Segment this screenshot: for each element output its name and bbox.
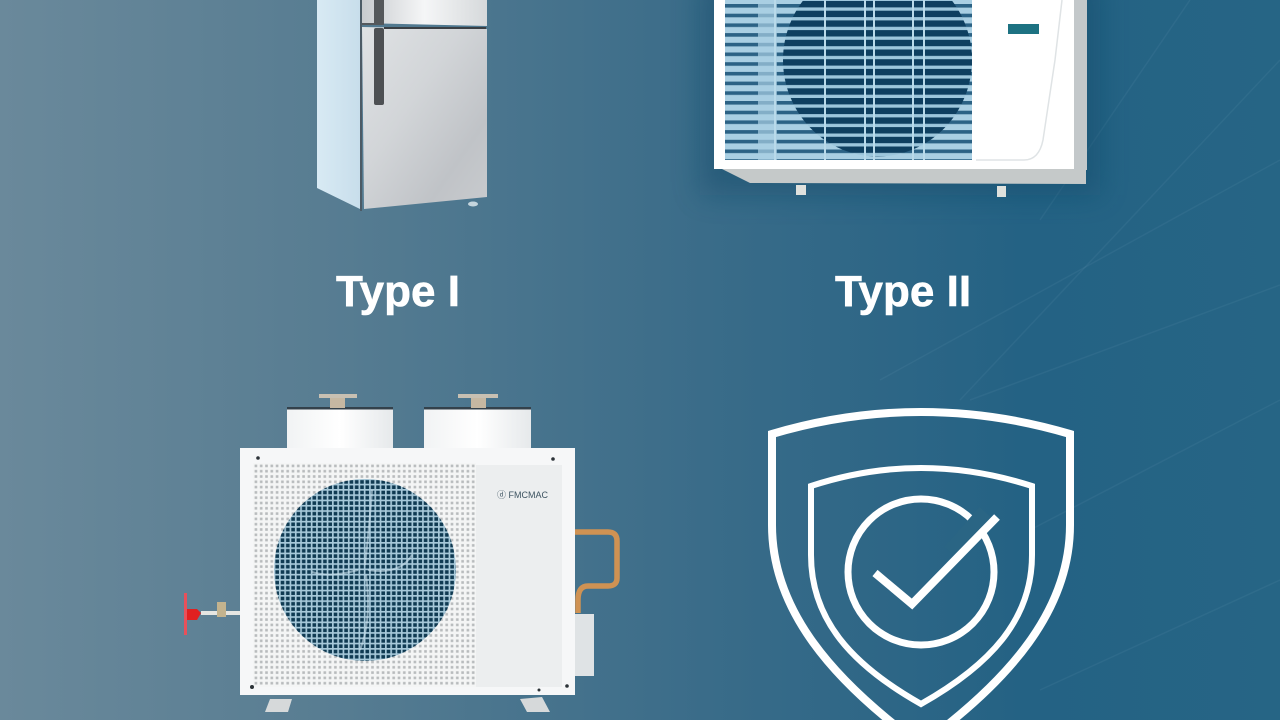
fridge lower door — [362, 27, 487, 209]
screws — [250, 456, 569, 692]
AC feet — [796, 185, 1006, 197]
appliance: refrigerator — [317, 0, 487, 211]
fridge handles — [374, 0, 384, 105]
fan — [274, 479, 456, 661]
check mark — [875, 512, 997, 604]
fridge upper door — [362, 0, 487, 26]
label: Type I: Type I — [336, 267, 460, 316]
mesh grille — [253, 463, 476, 687]
copper pipe — [574, 532, 617, 613]
mounting feet — [265, 697, 550, 712]
side box — [575, 614, 594, 676]
AC body — [714, 0, 1074, 169]
label: Type II: Type II — [835, 267, 971, 316]
appliance: outdoor air conditioner unit — [700, 0, 1100, 197]
AC badge — [1008, 24, 1039, 34]
AC base tray — [720, 168, 1086, 184]
AC louvre grille — [725, 0, 972, 160]
appliance: heat pump unit — [184, 394, 617, 712]
check circle — [848, 499, 994, 645]
brand mark: ⓓ FMCMAC — [497, 490, 548, 500]
cylinder tanks — [287, 394, 531, 450]
side panel — [476, 465, 562, 687]
red valve — [184, 593, 241, 635]
unit body — [240, 448, 575, 695]
fridge side panel — [317, 0, 360, 209]
icon: shield with check mark — [772, 412, 1070, 720]
shield outer outline — [772, 412, 1070, 720]
shield inner outline — [811, 468, 1032, 704]
AC right side — [1072, 0, 1087, 170]
